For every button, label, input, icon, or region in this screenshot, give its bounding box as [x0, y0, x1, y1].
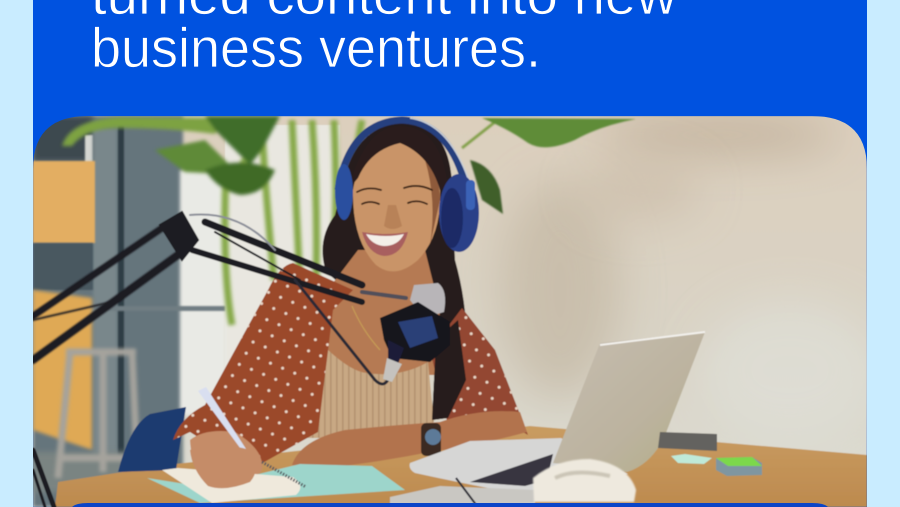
headline: business ventures.: [91, 16, 541, 79]
hair: [323, 122, 467, 420]
right arm: [292, 411, 527, 468]
table: [55, 426, 867, 507]
eyes and brows: [357, 186, 432, 204]
hand over notepad: [190, 445, 256, 488]
hair parting: [354, 142, 441, 190]
teal sticky note: [671, 454, 712, 464]
face: [353, 143, 440, 271]
coffee cup: [533, 459, 636, 502]
headphones: [335, 118, 479, 252]
wrist watch: [421, 423, 441, 456]
wall background: [33, 116, 880, 507]
grey notebook on desk: [658, 432, 717, 451]
headline: [91, 0, 678, 79]
shirt left: [173, 263, 353, 470]
bottom card peek: [72, 503, 828, 507]
writing hand: [190, 430, 262, 474]
woman: [173, 118, 528, 487]
necklace: [352, 306, 380, 350]
blurred room on the left: [33, 116, 226, 507]
notebook: [147, 462, 405, 503]
ribbed top: [300, 350, 434, 438]
blurred stool: [58, 352, 136, 478]
pen: [198, 388, 246, 450]
laptop: [410, 332, 705, 497]
nose shade: [384, 205, 402, 229]
plant: [62, 116, 362, 325]
paper and pen at bottom: [390, 478, 535, 507]
shirt right: [430, 308, 528, 435]
smile: [362, 232, 408, 256]
chair: [118, 407, 186, 472]
green sticky stack: [716, 457, 762, 476]
neck and chest: [320, 250, 440, 375]
plant leaves on the right: [462, 118, 636, 214]
photo: podcaster at desk: [33, 116, 880, 507]
microphone boom arm: [33, 212, 406, 507]
microphone: [380, 283, 450, 382]
